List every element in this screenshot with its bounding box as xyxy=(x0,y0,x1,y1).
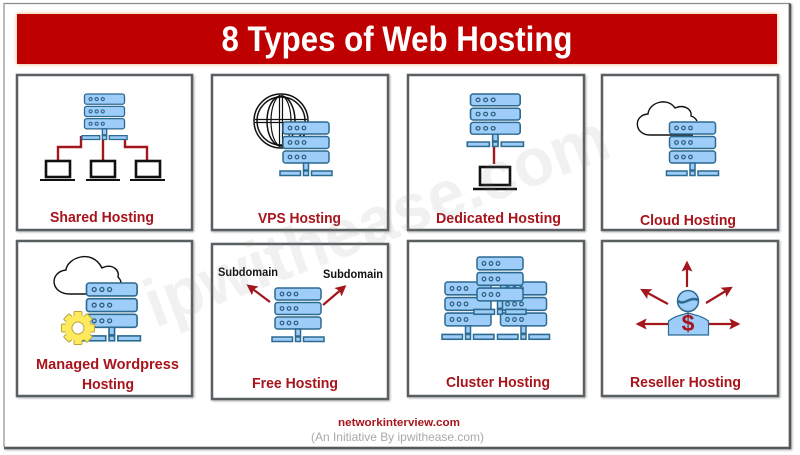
title banner: 8 Types of Web Hosting xyxy=(222,20,572,59)
icon: server with subdomain arrows: Subdomain xyxy=(218,265,278,279)
label: Managed Wordpress xyxy=(36,356,179,373)
icon: shared server with three laptops xyxy=(40,94,165,180)
title banner xyxy=(17,14,777,64)
label: VPS Hosting xyxy=(258,210,341,227)
panel: Managed Wordpress Hosting xyxy=(17,241,192,396)
footer site name: networkinterview.com xyxy=(338,417,460,429)
label: Cluster Hosting xyxy=(446,374,550,391)
icon: cloud, server and gear xyxy=(54,257,140,344)
icon: server with subdomain arrows xyxy=(218,265,383,342)
label: Reseller Hosting xyxy=(630,374,741,391)
label: Dedicated Hosting xyxy=(436,210,561,227)
icon: server cluster xyxy=(442,257,550,339)
panel: Shared Hosting xyxy=(17,75,192,230)
panel: Cloud Hosting xyxy=(602,75,778,230)
icon: reseller with arrows xyxy=(640,265,736,336)
panel: Free Hosting xyxy=(212,244,388,399)
panel: VPS Hosting xyxy=(212,75,388,230)
label: Shared Hosting xyxy=(50,209,154,226)
label: Free Hosting xyxy=(252,375,338,392)
icon: globe with server xyxy=(254,94,332,176)
icon: dedicated server with laptop xyxy=(467,94,523,189)
watermark: ipwithease.com xyxy=(134,99,619,342)
panel: Reseller Hosting xyxy=(602,241,778,396)
label: Cloud Hosting xyxy=(640,212,736,229)
panel: Dedicated Hosting xyxy=(408,75,584,230)
footer initiative note: (An Initiative By ipwithease.com) xyxy=(311,430,484,444)
panel: Cluster Hosting xyxy=(408,241,584,396)
icon: reseller with arrows: $ xyxy=(682,310,695,336)
label line two: Hosting xyxy=(82,376,134,393)
icon: server with subdomain arrows: Subdomain xyxy=(323,267,383,281)
icon: cloud with server xyxy=(637,102,718,176)
